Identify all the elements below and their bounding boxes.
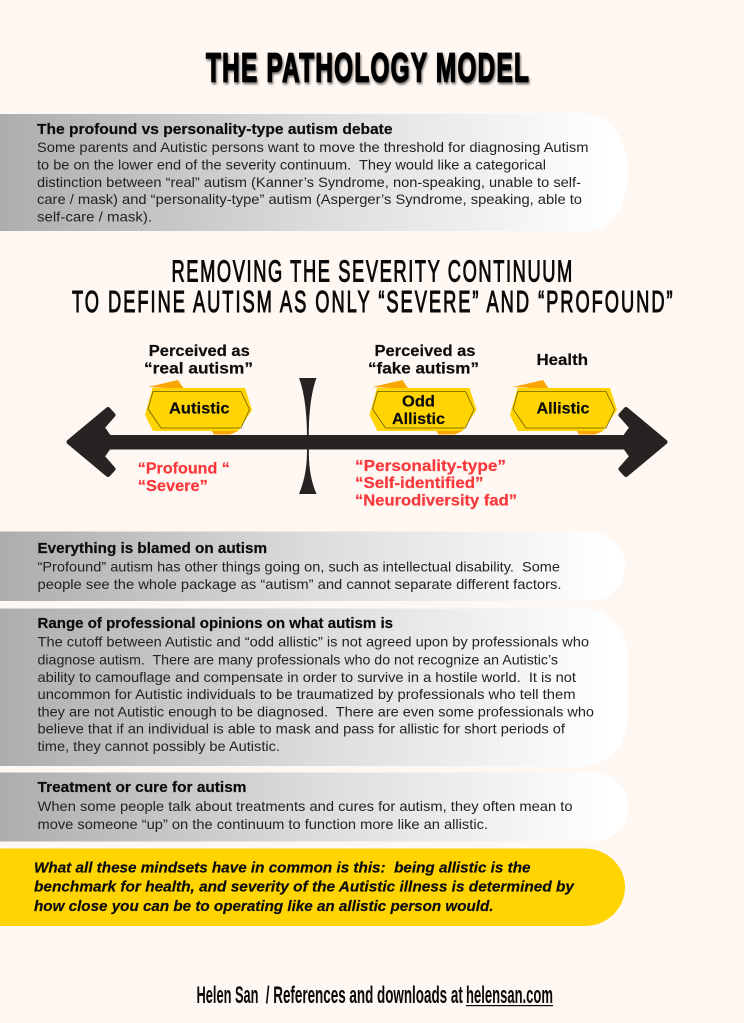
panel heading: opinions: Range of professional opinions on what autism is xyxy=(38,615,393,632)
panel body: debate: self-care / mask). xyxy=(37,208,152,224)
footer: credit and link: helensan.com xyxy=(466,982,553,1009)
section heading: removing the severity continuum: TO DEFINE AUTISM AS ONLY “SEVERE” AND “PROFOUND” xyxy=(72,285,673,319)
arrow: double-headed continuum xyxy=(69,410,665,474)
panel: everything is blamed on autism xyxy=(0,532,625,601)
panel body: opinions: time, they cannot possibly be Autistic. xyxy=(38,738,280,754)
badge: autistic: Autistic xyxy=(169,400,230,418)
panel body: debate: care / mask) and “personality-type” autism (Asperger’s Syndrome, speaking, able to xyxy=(37,191,582,207)
red labels: profound, severe: “Severe” xyxy=(138,478,208,495)
title: THE PATHOLOGY MODEL xyxy=(206,46,529,91)
callout text: benchmark for health, and severity of the Autistic illness is determined by xyxy=(34,878,575,896)
panel body: blamed: people see the whole package as “autism” and cannot separate different factors. xyxy=(38,576,562,592)
panel body: opinions: The cutoff between Autistic and “odd allistic” is not agreed upon by professionals who xyxy=(38,634,589,650)
arrow shaft xyxy=(100,435,634,450)
badge: odd allistic: Odd xyxy=(402,394,435,410)
footer: credit and link: Helen San xyxy=(196,982,258,1009)
red labels: personality-type, self-identified, neurodiversity fad xyxy=(355,458,517,510)
panel body: opinions xyxy=(38,634,594,754)
badge: autistic xyxy=(145,380,252,434)
panel body: blamed: “Profound” autism has other things going on, such as intellectual disability. Some xyxy=(38,558,560,574)
label: perceived as real autism: “real autism” xyxy=(144,360,253,378)
panel body: opinions: ability to camouflage and compensate in order to survive in a hostile world. It is not xyxy=(38,669,576,685)
label: perceived as real autism: Perceived as xyxy=(149,343,250,360)
divider: severity cutoff xyxy=(299,378,316,494)
callout text xyxy=(34,860,575,915)
callout: common mindset xyxy=(0,848,625,926)
panel heading: blamed: Everything is blamed on autism xyxy=(38,540,267,557)
badge: odd allistic xyxy=(370,380,476,434)
panel body: debate: Some parents and Autistic persons want to move the threshold for diagnosing Autism xyxy=(37,139,588,155)
continuum diagram xyxy=(69,343,665,510)
panel body: treatment xyxy=(38,798,573,832)
panel: treatment or cure xyxy=(0,772,628,842)
label: perceived as fake autism: Perceived as xyxy=(374,343,476,360)
section heading: removing the severity continuum: REMOVING THE SEVERITY CONTINUUM xyxy=(172,255,572,289)
red labels: profound, severe xyxy=(138,460,230,495)
red labels: personality-type, self-identified, neurodiversity fad: “Neurodiversity fad” xyxy=(355,492,517,510)
callout text: how close you can be to operating like an allistic person would. xyxy=(34,898,493,915)
panel body: debate: distinction between “real” autism (Kanner’s Syndrome, non-speaking, unable to self- xyxy=(37,174,581,190)
panel body: opinions: uncommon for Autistic individuals to be traumatized by professionals who tell them xyxy=(38,686,576,702)
panel body: debate xyxy=(37,139,588,224)
label: perceived as fake autism xyxy=(368,343,479,378)
label: perceived as fake autism: “fake autism” xyxy=(368,360,479,378)
panel body: blamed xyxy=(38,558,562,592)
callout text: What all these mindsets have in common is this: being allistic is the xyxy=(34,860,530,876)
badge: odd allistic: Allistic xyxy=(392,411,445,428)
label: health: Health xyxy=(536,352,588,369)
footer: credit and link: / References and downloads at xyxy=(266,982,463,1009)
panel heading: debate: The profound vs personality-type autism debate xyxy=(37,121,392,138)
panel body: treatment: move someone “up” on the continuum to function more like an allistic. xyxy=(38,816,488,832)
panel heading: treatment: Treatment or cure for autism xyxy=(38,779,246,796)
section heading: removing the severity continuum xyxy=(72,255,673,319)
panel: range of professional opinions xyxy=(0,608,628,766)
footer: credit and link xyxy=(196,982,553,1009)
panel body: opinions: they are not Autistic enough to be diagnosed. There are even some professionals who xyxy=(38,704,594,720)
panel body: opinions: believe that if an individual is able to mask and pass for allistic for short periods of xyxy=(38,720,565,736)
red labels: personality-type, self-identified, neurodiversity fad: “Personality-type” xyxy=(355,458,506,475)
panel body: opinions: diagnose autism. There are many professionals who do not recognize an Autistic’s xyxy=(38,652,558,668)
panel: profound vs personality-type debate xyxy=(0,114,628,231)
label: perceived as real autism xyxy=(144,343,253,378)
panel body: debate: to be on the lower end of the severity continuum. They would like a categorical xyxy=(37,156,546,172)
panel body: treatment: When some people talk about treatments and cures for autism, they often mean to xyxy=(38,798,573,814)
red labels: personality-type, self-identified, neurodiversity fad: “Self-identified” xyxy=(355,475,484,492)
badge: allistic xyxy=(510,380,617,434)
red labels: profound, severe: “Profound “ xyxy=(138,460,230,478)
badge: allistic: Allistic xyxy=(536,400,590,418)
